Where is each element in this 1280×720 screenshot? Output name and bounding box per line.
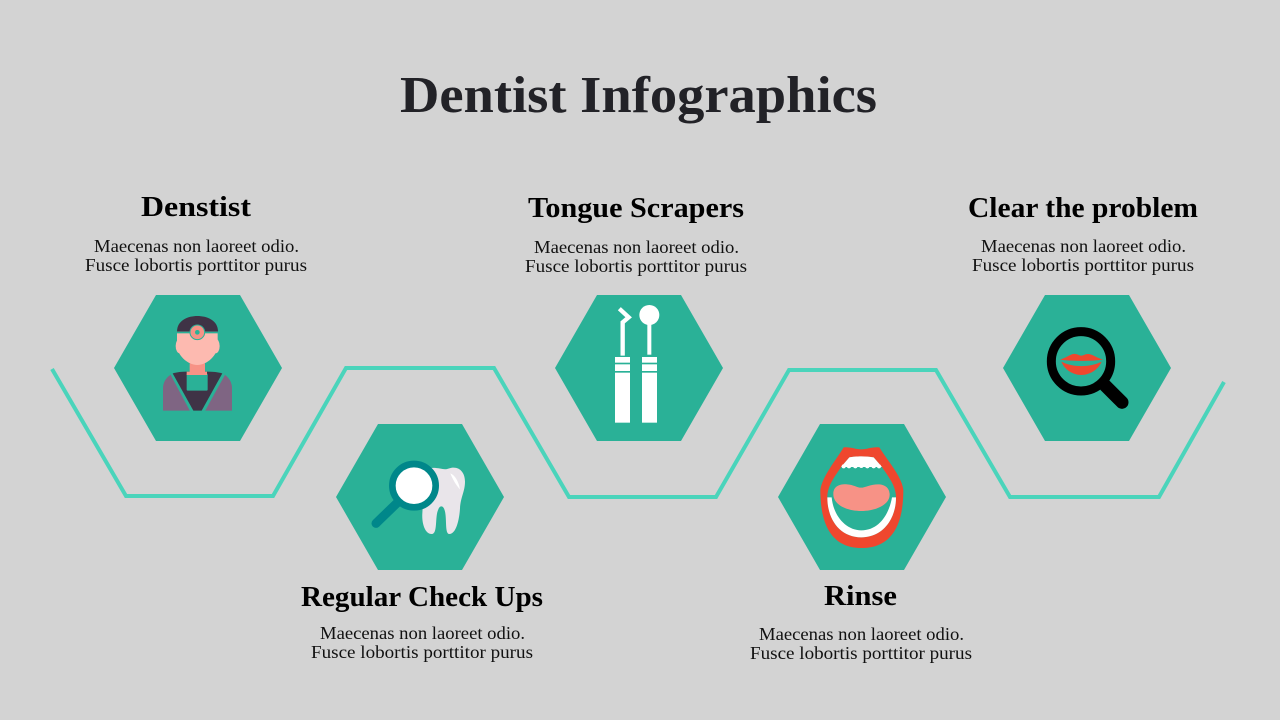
text block: check ups description <box>311 623 533 662</box>
hexagon: dentist <box>114 295 282 441</box>
text block: scrapers description: Fusce lobortis porttitor purus <box>525 256 747 276</box>
text block: rinse description: Fusce lobortis porttitor purus <box>750 643 972 663</box>
hexagon: rinse <box>778 424 946 570</box>
title: Dentist Infographics <box>400 67 877 124</box>
icon: magnifier over lips <box>1051 332 1122 402</box>
text block: problem description <box>972 236 1194 275</box>
heading: Denstist: Denstist <box>141 191 251 223</box>
hexagon: scrapers <box>555 295 723 441</box>
panel: clear the problem <box>968 192 1198 441</box>
panel: dentist <box>85 191 307 441</box>
text block: dentist description: Maecenas non laoreet odio. <box>94 236 299 256</box>
text block: check ups description: Maecenas non laoreet odio. <box>320 623 525 643</box>
text block: scrapers description: Maecenas non laoreet odio. <box>534 237 739 257</box>
text block: rinse description <box>750 624 972 663</box>
icon: magnifier over tooth <box>376 464 465 534</box>
icon: open mouth <box>820 447 903 548</box>
text block: problem description: Fusce lobortis porttitor purus <box>972 255 1194 275</box>
heading: Tongue Scrapers: Tongue Scrapers <box>528 192 744 224</box>
text block: check ups description: Fusce lobortis porttitor purus <box>311 642 533 662</box>
hexagon: problem <box>1003 295 1171 441</box>
text block: dentist description <box>85 236 307 275</box>
hexagon: check ups <box>336 424 504 570</box>
text block: rinse description: Maecenas non laoreet odio. <box>759 624 964 644</box>
icon: dentist with head mirror <box>163 316 232 411</box>
panel: regular check ups <box>301 424 543 662</box>
text block: scrapers description <box>525 237 747 276</box>
heading: Clear the problem: Clear the problem <box>968 192 1198 224</box>
heading: Rinse: Rinse <box>824 580 897 612</box>
zigzag connector line <box>52 368 1224 497</box>
text block: dentist description: Fusce lobortis porttitor purus <box>85 255 307 275</box>
panel: rinse <box>750 424 972 663</box>
heading: Regular Check Ups: Regular Check Ups <box>301 581 543 613</box>
panel: tongue scrapers <box>525 192 747 441</box>
icon: dental tools <box>615 305 659 423</box>
text block: problem description: Maecenas non laoreet odio. <box>981 236 1186 256</box>
